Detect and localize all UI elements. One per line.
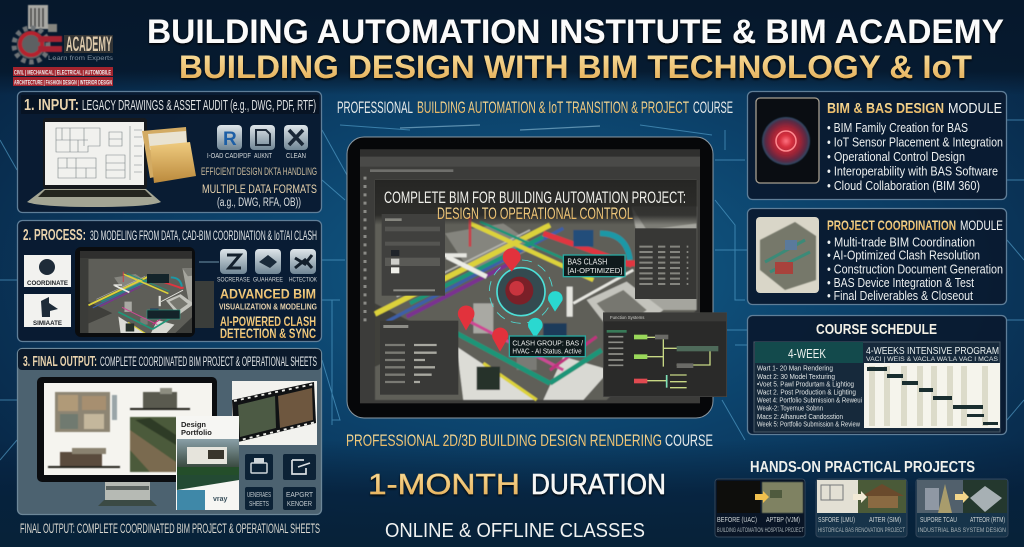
module title: BIM & BAS DESIGN bbox=[827, 101, 944, 117]
text: data handling: EFFICIENT DESIGN DKTA HANDLING bbox=[201, 166, 317, 178]
project card: renovation: HISTORICAL BAS RENOVATION PROJECT bbox=[818, 528, 905, 534]
icon: load, audit, clean: I-OAD CADIPDF bbox=[207, 153, 251, 160]
module list: • AI-Optimized Clash Resolution bbox=[827, 248, 980, 262]
callout: BAS clash: BAS CLASH bbox=[567, 257, 608, 266]
tablet: BIM visualization bbox=[75, 247, 219, 337]
AI clash sphere bbox=[489, 260, 553, 323]
schedule rows: •Voet 5. Pawl Produrtam & Lightiog bbox=[757, 380, 854, 388]
icon: film strip bbox=[232, 381, 317, 445]
module title: MODULE bbox=[960, 217, 1003, 233]
panel: course schedule bbox=[748, 316, 1006, 434]
schedule rows: Wart 1- 20 Man Rendering bbox=[757, 364, 833, 372]
tablet: main BIM project screen bbox=[347, 137, 727, 418]
card: design portfolio: Portfolio bbox=[181, 428, 212, 437]
heading: rendering course: COURSE bbox=[665, 432, 713, 450]
module list: • Multi-trade BIM Coordination bbox=[827, 234, 975, 250]
icons: source, guarantee, detection bbox=[217, 249, 317, 284]
module list bbox=[827, 234, 1003, 303]
gantt chart bbox=[864, 363, 1000, 428]
module title: PROJECT COORDINATION bbox=[827, 217, 956, 233]
text: duration: 1-MONTH bbox=[368, 469, 520, 501]
tablet screen with 3D model bbox=[360, 149, 727, 403]
button: generate sheets: UENERAES bbox=[247, 490, 271, 499]
tablet heading bbox=[384, 188, 686, 223]
card: design portfolio: Design bbox=[181, 420, 206, 429]
text: multiple data formats bbox=[202, 182, 317, 209]
project card: renovation bbox=[816, 479, 907, 537]
callout: clash group: HVAC - AI Status. Active bbox=[512, 347, 582, 356]
title: BUILDING DESIGN WITH BIM TECHNOLOGY & IoT bbox=[179, 49, 972, 85]
heading: automation course: COURSE bbox=[693, 99, 733, 117]
schedule rows: Weak-2: Toyemue Sobnn bbox=[757, 404, 823, 412]
schedule rows: Macs 2: Alhanued Candosstion bbox=[757, 412, 843, 421]
heading: final output bbox=[23, 353, 317, 370]
heading: process: 3D MODELING FROM DATA, CAD-BIM COORDINATION & IoT/AI CLASH bbox=[90, 228, 317, 243]
red clash pins bbox=[458, 248, 521, 352]
schedule table: VACI | WEIS & VACLA WA'LA VAC I MCAS bbox=[866, 356, 999, 363]
module list: • Cloud Collaboration (BIM 360) bbox=[827, 178, 980, 193]
heading: automation course bbox=[337, 99, 733, 117]
text: AI clash detection bbox=[220, 314, 316, 341]
title bbox=[147, 13, 1004, 85]
project card: industrial: INDUSTRIAL BAS SYSTEM DESIGN bbox=[918, 528, 1006, 534]
heading: rendering course: PROFESSIONAL 2D/3D BUILDING DESIGN RENDERING bbox=[346, 432, 662, 450]
panel: final output bbox=[18, 348, 322, 514]
logo discipline bands bbox=[13, 67, 113, 86]
text: duration: DURATION bbox=[531, 469, 666, 501]
logo discipline bands: ARCHITECTURE | FASHION DESIGN | INTERIOR DESIGN bbox=[14, 80, 112, 86]
button: export render bbox=[283, 454, 316, 510]
node graph panel: Function Systems bbox=[610, 315, 644, 320]
icons: source, guarantee, detection: GUAHAREE bbox=[253, 276, 284, 284]
panel: final output: COMPLETE COORDINATED BIM PROJECT & OPERATIONAL SHEETS bbox=[100, 354, 317, 369]
icons: source, guarantee, detection: SOCRERASE bbox=[217, 276, 251, 284]
callout: BAS clash bbox=[563, 255, 625, 277]
icon: load, audit, clean: AUKNT bbox=[254, 153, 273, 160]
button: export render: EAPGRT bbox=[286, 490, 313, 499]
button: generate sheets: SHEETS bbox=[249, 499, 269, 508]
callout: clash group: CLASH GROUP: BAS / bbox=[512, 338, 584, 347]
module title: MODULE bbox=[948, 101, 1002, 117]
project card: industrial bbox=[916, 479, 1008, 537]
heading: input: LEGACY DRAWINGS & ASSET AUDIT (e.g., DWG, PDF, RTF) bbox=[82, 98, 316, 114]
panel: process bbox=[18, 220, 322, 342]
text: duration bbox=[368, 469, 666, 501]
module list: • BAS Device Integration & Test bbox=[827, 275, 974, 290]
callout: clash group bbox=[509, 336, 585, 357]
properties panel bbox=[380, 321, 458, 395]
right data panel bbox=[635, 228, 697, 299]
icon: laptop with blueprint bbox=[27, 118, 161, 207]
module list: • Final Deliverables & Closeout bbox=[827, 288, 973, 303]
schedule rows bbox=[757, 364, 862, 428]
project card: renovation: AITER (SIM) bbox=[869, 517, 901, 524]
heading: automation course: BUILDING AUTOMATION & IoT TRANSITION & PROJECT bbox=[417, 99, 689, 117]
heading: final output: 3. FINAL OUTPUT: bbox=[23, 353, 97, 370]
schedule rows: Weet 4: Portfolio Submission & Reweui bbox=[757, 396, 862, 404]
icon: load, audit, clean: R bbox=[223, 129, 237, 150]
logo bbox=[13, 5, 114, 86]
heading: process bbox=[23, 227, 317, 244]
text: multiple data formats: MULTIPLE DATA FORMATS bbox=[202, 182, 317, 196]
schedule table: 4-WEEK bbox=[788, 346, 826, 361]
text: advanced BIM: VISUALIZATION & MODELING bbox=[219, 302, 317, 312]
icons: source, guarantee, detection: HCTECTIOK bbox=[289, 276, 317, 284]
logo discipline bands: CIVIL | MECHANICAL | ELECTRICAL | AUTOMOBILE bbox=[14, 70, 111, 76]
tablet heading: COMPLETE BIM FOR BUILDING AUTOMATION PROJECT: bbox=[384, 188, 686, 207]
panel: input bbox=[18, 92, 322, 212]
tablet heading: DESIGN TO OPERATIONAL CONTROL bbox=[437, 204, 633, 223]
left tools panel bbox=[382, 214, 445, 296]
text: ACADEMY bbox=[66, 33, 112, 56]
project card: hospital bbox=[715, 479, 805, 537]
module list: • BIM Family Creation for BAS bbox=[827, 120, 968, 135]
schedule rows: Week 5: Portfolio Submission & Review bbox=[757, 420, 860, 428]
module list bbox=[827, 120, 1003, 193]
card: coordinate bbox=[24, 255, 71, 287]
logo wordmark: Learn from Experts bbox=[48, 55, 114, 62]
text: advanced BIM bbox=[219, 286, 317, 312]
text: AI clash detection: AI-POWERED CLASH bbox=[220, 314, 316, 329]
schedule table bbox=[754, 342, 1000, 432]
project card: industrial: ATTEOR (RTM) bbox=[970, 517, 1005, 524]
icon: folders bbox=[142, 127, 196, 183]
schedule rows: Wact 2. Post Production & Lighting bbox=[757, 388, 856, 396]
image: coordination model bbox=[756, 217, 819, 293]
schedule rows: Wact 2: 30 Model Texturing bbox=[757, 372, 835, 381]
project card: hospital: BUILDING AUTOMATION HOSPITAL PROJECT bbox=[717, 528, 804, 534]
card: design portfolio bbox=[176, 416, 239, 510]
heading: process: 2. PROCESS: bbox=[23, 227, 86, 244]
project card: industrial: SUPORE TCAU bbox=[920, 517, 957, 524]
icon: load, audit, clean: CLEAN bbox=[286, 153, 306, 160]
image: sensor orb bbox=[756, 98, 819, 183]
panel: BIM and BAS module bbox=[748, 92, 1006, 200]
cyan pins bbox=[528, 291, 563, 338]
node graph panel bbox=[603, 313, 727, 397]
card: design portfolio: vray bbox=[213, 496, 228, 503]
card: coordinate: COORDINATE bbox=[27, 280, 69, 287]
project card: hospital: APTBP (VJM) bbox=[766, 517, 800, 524]
title: BUILDING AUTOMATION INSTITUTE & BIM ACADEMY bbox=[147, 13, 1004, 51]
icon: monitor with drawings bbox=[37, 377, 217, 506]
icon: load, audit, clean bbox=[207, 125, 308, 160]
button: export render: KENOER bbox=[287, 499, 312, 508]
heading: automation course: PROFESSIONAL bbox=[337, 99, 413, 117]
text: AI clash detection: DETECTION & SYNC bbox=[220, 326, 316, 341]
button: generate sheets bbox=[245, 454, 273, 510]
text: multiple data formats: (a.g., DWG, RFA, OB)) bbox=[217, 197, 301, 209]
text: final output caption: FINAL OUTPUT: COMPLETE COORDINATED BIM PROJECT & OPERATIONAL SHEETS bbox=[20, 520, 320, 536]
schedule title: COURSE SCHEDULE bbox=[816, 321, 937, 338]
callout: BAS clash: [AI-OPTIMIZED] bbox=[567, 266, 622, 275]
project card: hospital: BEFORE (UAC) bbox=[717, 517, 757, 524]
panel: project coordination module bbox=[748, 208, 1006, 304]
heading: input: 1. INPUT: bbox=[24, 97, 79, 114]
card: simulate: SIMIAATE bbox=[33, 320, 63, 327]
project card: renovation: SSFORE (LMU) bbox=[818, 517, 855, 524]
heading: practical projects: HANDS-ON PRACTICAL PROJECTS bbox=[750, 459, 975, 476]
module list: • Operational Control Design bbox=[827, 149, 965, 164]
icon: logo gear bbox=[14, 28, 62, 62]
card: simulate bbox=[24, 294, 71, 327]
heading: input bbox=[21, 95, 319, 114]
icon: logo building bbox=[28, 5, 57, 32]
text: advanced BIM: ADVANCED BIM bbox=[220, 286, 316, 302]
text: class modes: ONLINE & OFFLINE CLASSES bbox=[385, 520, 645, 542]
logo wordmark bbox=[48, 33, 114, 62]
schedule table: 4-WEEKS INTENSIVE PROGRAM bbox=[866, 345, 999, 357]
